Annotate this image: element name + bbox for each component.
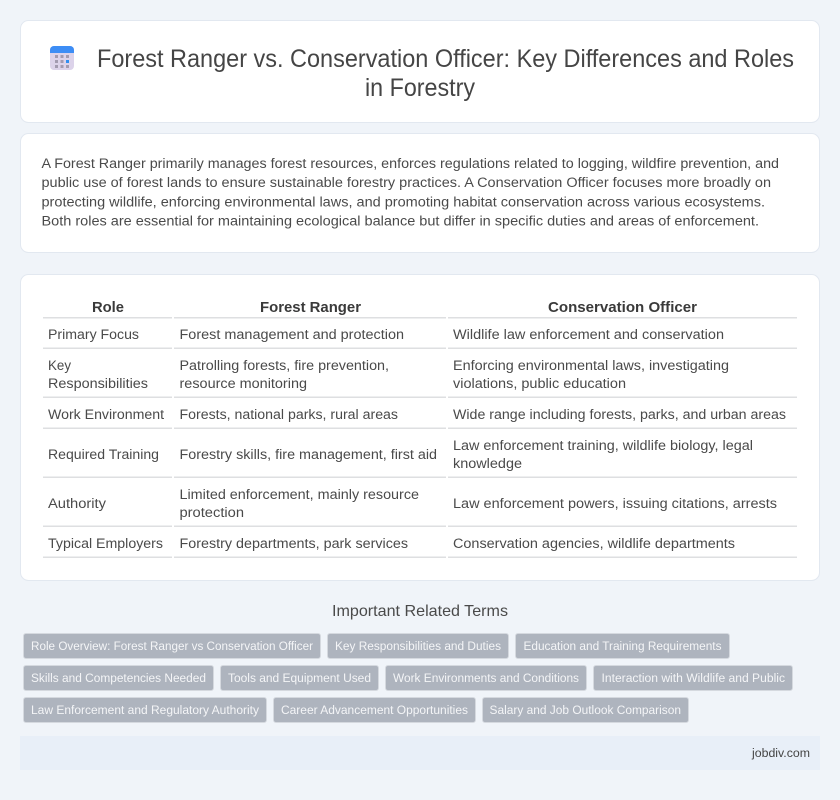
panel: related term chips: Education and Training Requirements [524, 639, 722, 653]
row: authority: protection [180, 505, 244, 521]
row: required training [43, 438, 797, 478]
panel: title header [20, 20, 820, 122]
panel: related term chips: Interaction with Wildlife and Public [602, 671, 785, 685]
panel: related term chips: Key Responsibilities and Duties [335, 639, 501, 653]
panel: related term chips: Skills and Competencies Needed [31, 671, 206, 685]
table header row: Forest Ranger [260, 299, 361, 316]
row: key responsibilities: violations, public education [453, 376, 626, 392]
heading: related terms: Important Related Terms [332, 603, 508, 620]
row: typical employers: Forestry departments, park services [180, 536, 408, 552]
row: primary focus: Primary Focus [48, 327, 139, 343]
text block: summary: public use of forest lands to ensure sustainable forestry practices. A Conservation Officer focuses more broadly on [42, 175, 771, 191]
panel: related term chips: Role Overview: Forest Ranger vs Conservation Officer [31, 639, 313, 653]
text block: summary: A Forest Ranger primarily manages forest resources, enforces regulations related to logging, wildfire prevention, and [42, 156, 779, 172]
row: primary focus: Forest management and protection [180, 327, 404, 343]
row: required training: Required Training [48, 447, 159, 463]
text block: summary: Both roles are essential for maintaining ecological balance but differ in specific duties and areas of enforcement. [42, 214, 759, 230]
row: work environment [43, 407, 797, 429]
row: key responsibilities: Responsibilities [48, 376, 148, 392]
title: Forest Ranger vs. Conservation Officer: Key Differences and Roles [97, 45, 794, 73]
row: typical employers [43, 536, 797, 558]
row: primary focus [43, 327, 797, 349]
row: work environment: Wide range including forests, parks, and urban areas [453, 407, 786, 423]
panel: related term chips: Career Advancement Opportunities [281, 703, 468, 717]
row: authority: Limited enforcement, mainly resource [180, 487, 419, 503]
row: key responsibilities: Key [48, 358, 72, 374]
panel: related term chips [24, 634, 792, 722]
table header row [43, 299, 797, 318]
row: key responsibilities: resource monitoring [180, 376, 307, 392]
row: authority: Authority [48, 496, 107, 512]
footer [20, 736, 820, 770]
footer: jobdiv.com [751, 746, 810, 760]
text block: summary [42, 156, 779, 230]
row: typical employers: Conservation agencies, wildlife departments [453, 536, 735, 552]
table header row: Role [92, 299, 124, 316]
row: key responsibilities: Patrolling forests, fire prevention, [180, 358, 389, 374]
row: typical employers: Typical Employers [48, 536, 163, 552]
panel: related term chips: Salary and Job Outlook Comparison [490, 703, 681, 717]
panel: related term chips: Tools and Equipment Used [228, 671, 371, 685]
row: authority: Law enforcement powers, issuing citations, arrests [453, 496, 777, 512]
row: authority [43, 487, 797, 527]
row: work environment: Forests, national parks, rural areas [180, 407, 398, 423]
panel: related term chips: Work Environments and Conditions [393, 671, 579, 685]
panel: comparison table [20, 274, 820, 580]
panel: related term chips: Law Enforcement and Regulatory Authority [31, 703, 260, 717]
text block: summary: protecting wildlife, enforcing environmental laws, and promoting habitat conservation across various ecosystems. [42, 194, 765, 210]
row: key responsibilities [43, 358, 797, 398]
table header row: Conservation Officer [548, 299, 697, 316]
title [97, 45, 794, 102]
row: required training: Forestry skills, fire management, first aid [180, 447, 437, 463]
icon: calendar [50, 46, 74, 70]
row: required training: Law enforcement training, wildlife biology, legal [453, 438, 753, 454]
panel: summary paragraph [20, 134, 820, 252]
row: work environment: Work Environment [48, 407, 164, 423]
row: required training: knowledge [453, 456, 522, 472]
row: primary focus: Wildlife law enforcement and conservation [453, 327, 724, 343]
title: in Forestry [365, 74, 475, 102]
row: key responsibilities: Enforcing environmental laws, investigating [453, 358, 729, 374]
